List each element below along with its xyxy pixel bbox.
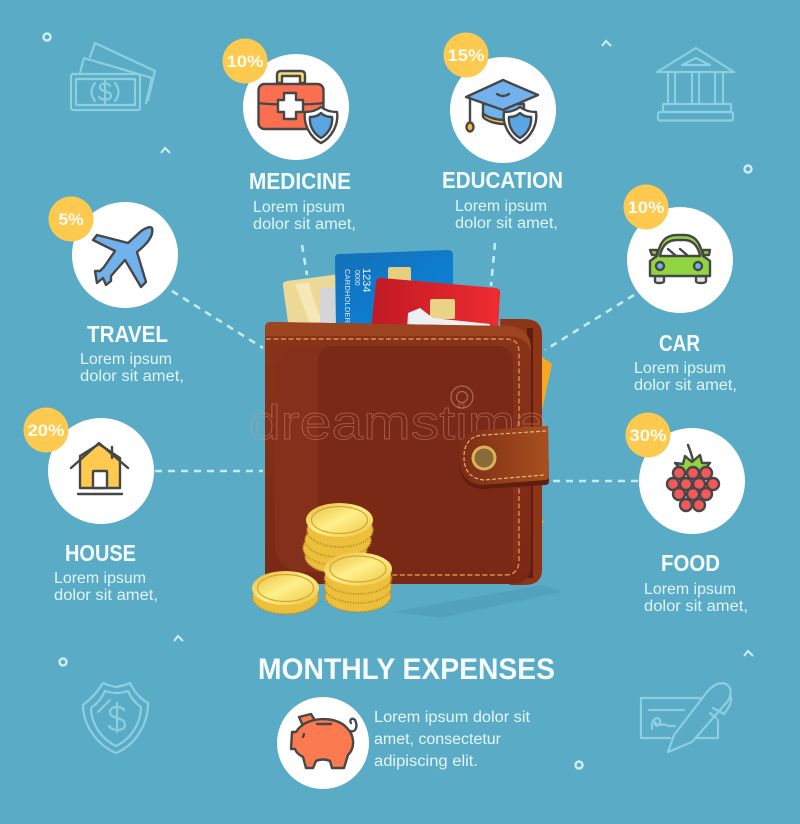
- red card: [371, 278, 500, 330]
- text: savings description: amet, consectetur: [374, 731, 501, 748]
- icon: piggy bank: [291, 714, 356, 768]
- gold card: [283, 274, 345, 330]
- text: savings description: Lorem ipsum dolor sit: [374, 709, 531, 726]
- wallet illustration: 0000: [353, 270, 360, 286]
- panel: medicine: [222, 38, 356, 233]
- badge: 5%: 5%: [58, 211, 84, 229]
- heading: travel: TRAVEL: [87, 321, 168, 347]
- wallet shadow: [392, 585, 562, 618]
- text: savings description: adipiscing elit.: [374, 753, 478, 770]
- background icon: bank: [657, 48, 734, 120]
- text: education: Lorem ipsum: [455, 198, 547, 215]
- car circle: [627, 207, 733, 313]
- badge: 20%: 20%: [28, 422, 65, 440]
- panel: travel: [48, 196, 184, 385]
- text: house: Lorem ipsum: [54, 570, 146, 587]
- connector dashes: [155, 243, 640, 481]
- background icon: banknotes: [71, 43, 155, 110]
- badge: 20%: [24, 408, 68, 452]
- text: medicine: dolor sit amet,: [253, 216, 356, 233]
- badge: 30%: [626, 412, 670, 458]
- panel: house: [24, 408, 158, 604]
- food circle: [639, 428, 745, 534]
- panel: food: [626, 412, 748, 615]
- badge: 30%: 30%: [630, 427, 667, 445]
- background icon: cheque and pen: [641, 683, 731, 752]
- coins: rear stack: [303, 503, 373, 573]
- house circle: [48, 418, 154, 524]
- savings circle: [277, 697, 369, 789]
- heading: food: FOOD: [661, 550, 720, 576]
- text: travel: dolor sit amet,: [80, 368, 184, 385]
- badge: 15%: [444, 32, 488, 78]
- decorative rings and carets: [44, 34, 753, 768]
- inner panel: [275, 346, 519, 572]
- heading: education: EDUCATION: [442, 167, 563, 193]
- icon: airplane: [93, 227, 152, 287]
- travel circle: [72, 202, 178, 308]
- icon: car: [650, 235, 710, 283]
- heading: car: CAR: [659, 330, 700, 356]
- text: car: dolor sit amet,: [634, 377, 737, 394]
- coins: single: [252, 571, 319, 614]
- icon: house: [71, 443, 128, 494]
- background icon: shield with dollar: [83, 683, 148, 753]
- text: travel: Lorem ipsum: [80, 351, 172, 368]
- badge: 10%: [222, 38, 268, 84]
- text: medicine: Lorem ipsum: [253, 199, 345, 216]
- text: travel: [80, 351, 184, 385]
- clasp: [459, 431, 549, 489]
- text: education: dolor sit amet,: [455, 215, 558, 232]
- text: house: [54, 570, 158, 604]
- text: car: Lorem ipsum: [634, 360, 726, 377]
- orange receipt: [532, 350, 552, 420]
- text: savings description: [374, 709, 531, 770]
- blue card: [335, 250, 453, 330]
- wallet illustration: [249, 250, 562, 618]
- icon: first aid kit: [258, 71, 337, 143]
- badge: 5%: [48, 196, 94, 242]
- heading: house: HOUSE: [65, 540, 136, 566]
- watermark: dreamstime: [249, 397, 547, 450]
- text: car: [634, 360, 737, 394]
- title: MONTHLY EXPENSES: [258, 653, 555, 686]
- panel: car: [624, 184, 737, 394]
- education circle: [450, 57, 556, 163]
- badge: 10%: 10%: [226, 53, 264, 71]
- medicine circle: [243, 54, 349, 160]
- wallet front: [265, 322, 531, 584]
- badge: 10%: 10%: [628, 199, 665, 217]
- heading: medicine: MEDICINE: [249, 168, 351, 194]
- wallet illustration: CARDHOLDER: [343, 269, 352, 324]
- text: education: [455, 198, 558, 232]
- wallet back: [500, 319, 542, 585]
- panel: education: [442, 32, 563, 232]
- text: food: Lorem ipsum: [644, 581, 736, 598]
- badge: 15%: 15%: [448, 47, 485, 65]
- text: food: dolor sit amet,: [644, 598, 748, 615]
- text: food: [644, 581, 748, 615]
- text: house: dolor sit amet,: [54, 587, 158, 604]
- snap button: [472, 446, 496, 470]
- stitching: [266, 339, 519, 575]
- badge: 10%: [624, 184, 668, 230]
- panel: savings: [277, 697, 531, 789]
- icon: graduation cap: [466, 80, 538, 143]
- coins: front stack: [324, 552, 392, 612]
- text: medicine: [253, 199, 356, 233]
- wallet illustration: 1234: [360, 268, 372, 292]
- icon: raspberry: [667, 445, 719, 511]
